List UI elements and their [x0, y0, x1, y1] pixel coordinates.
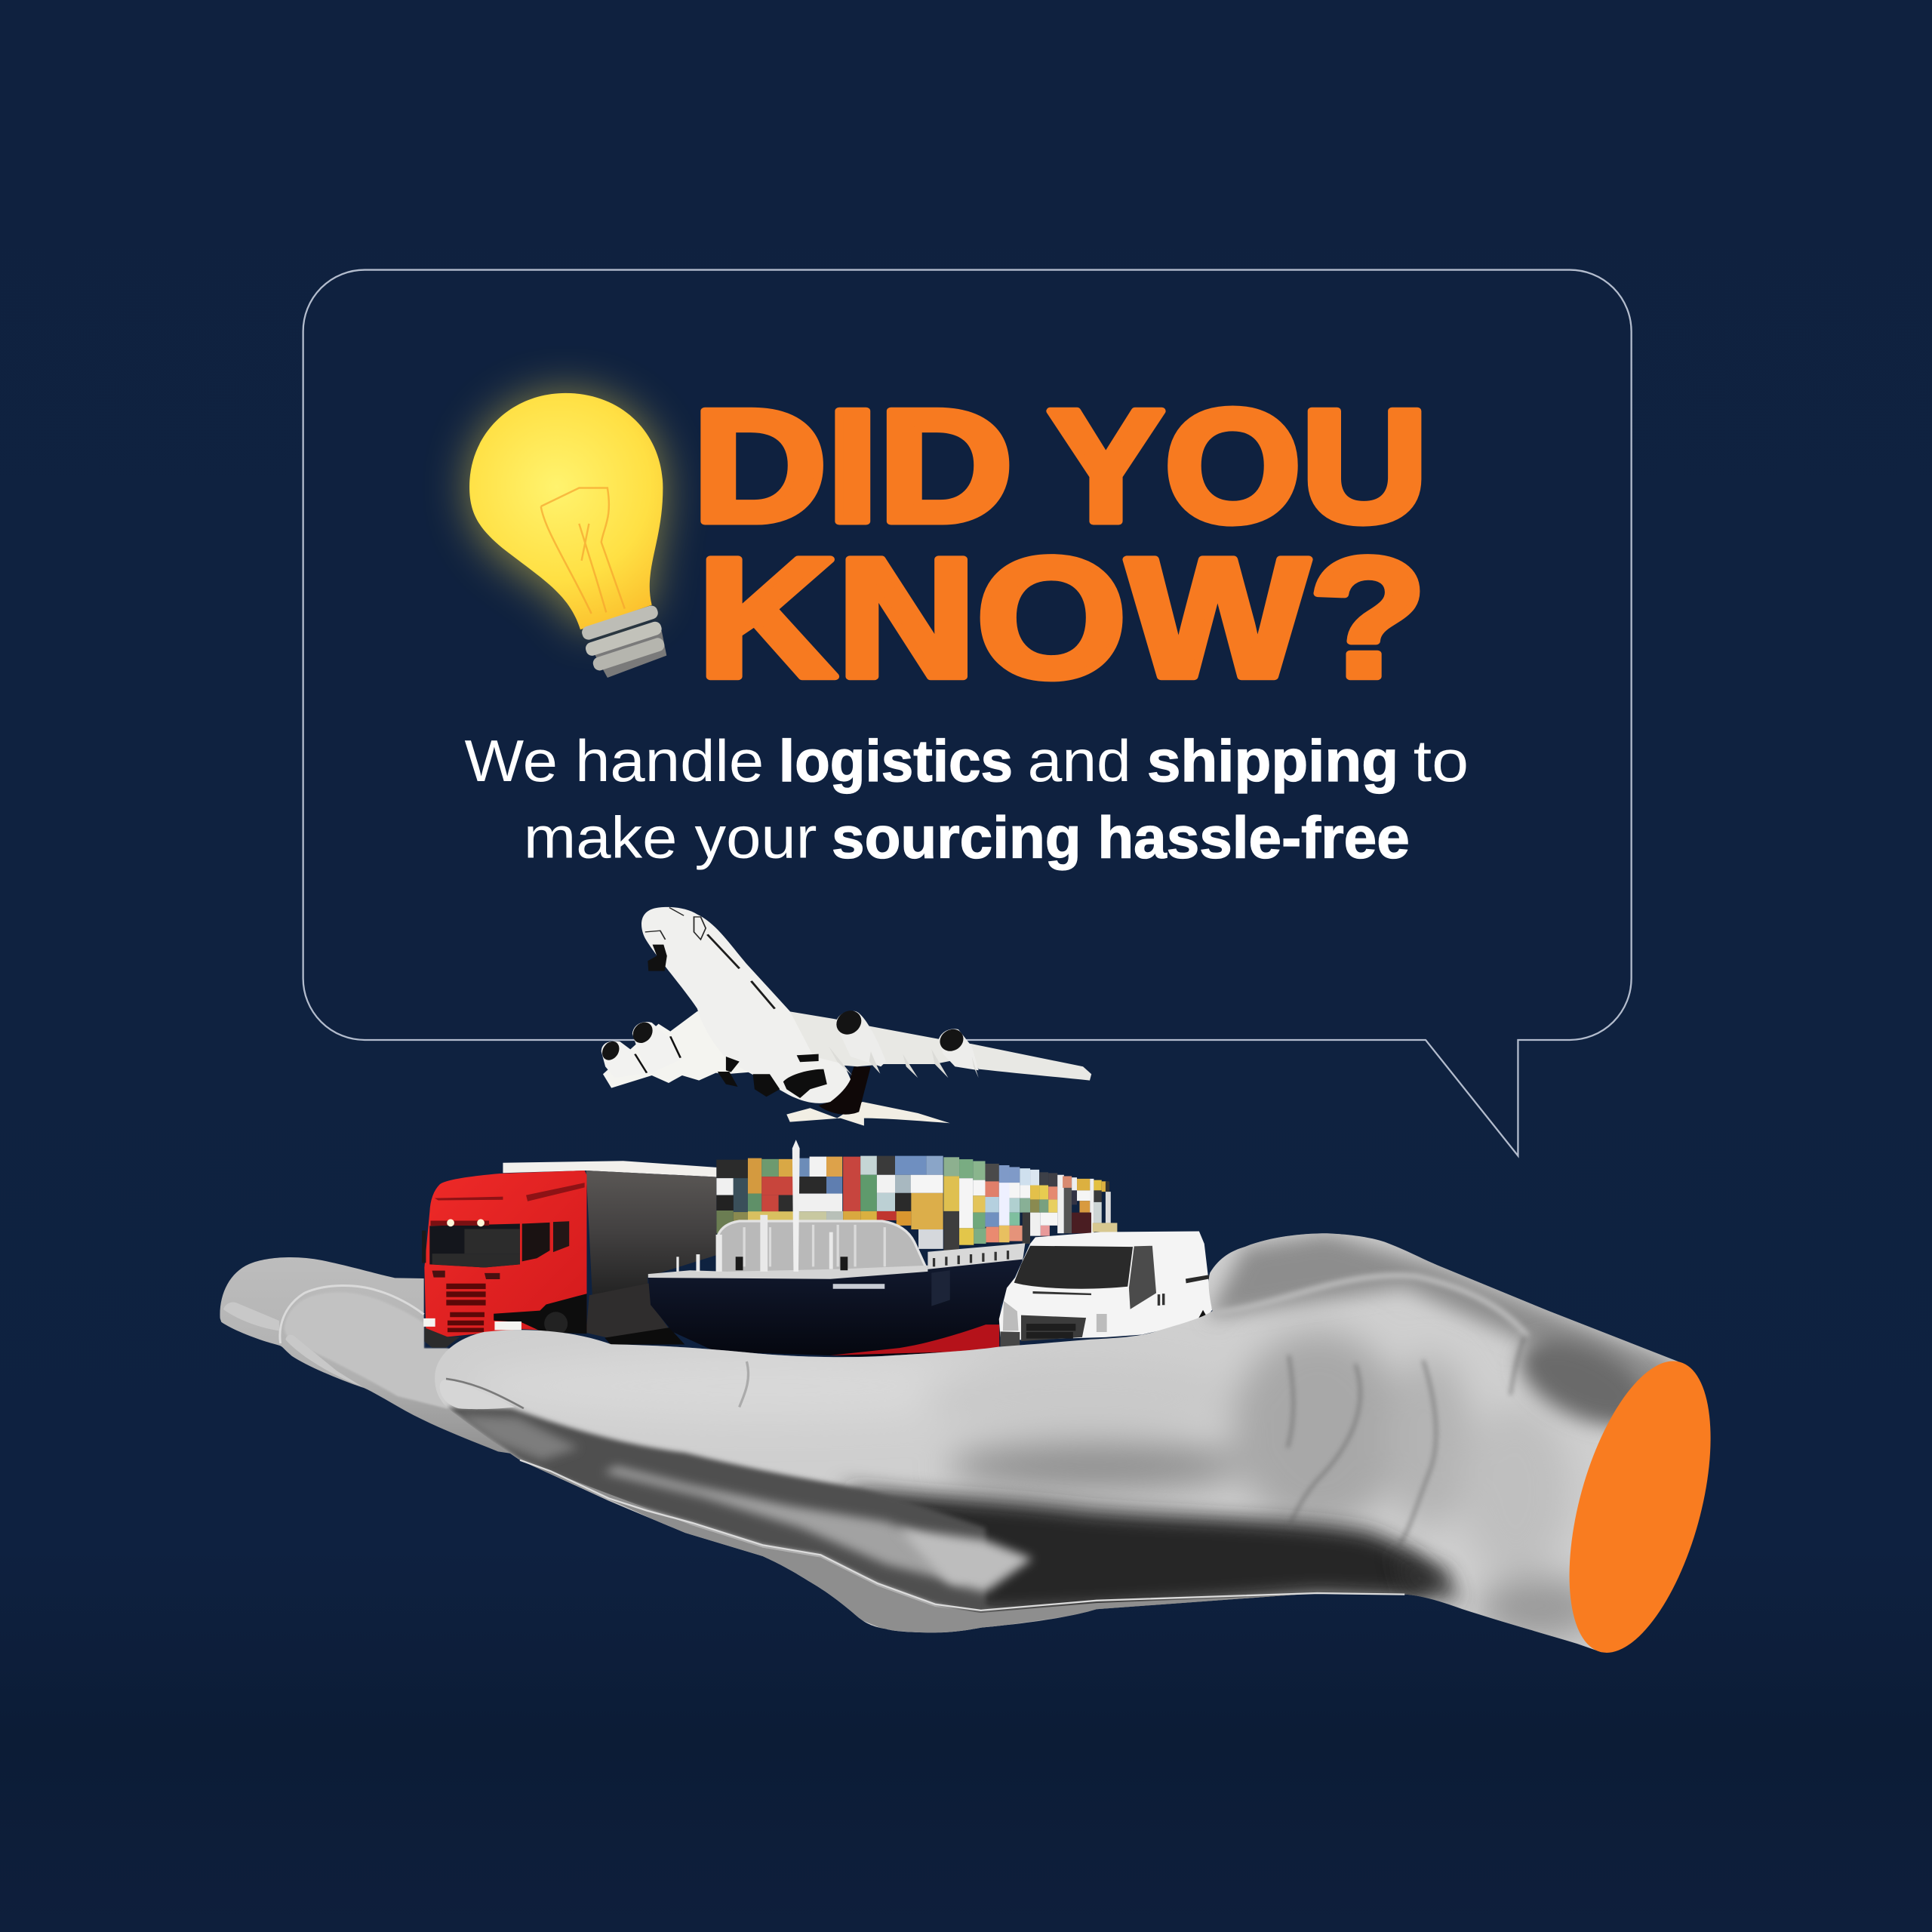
van grille slots: [1026, 1324, 1075, 1339]
bulb glow: [469, 393, 663, 629]
thumb nail crease: [446, 1379, 524, 1408]
plane fuselage: [641, 907, 851, 1103]
van side window: [1129, 1246, 1156, 1309]
first finger nail: [223, 1303, 279, 1331]
van hood line: [1032, 1291, 1091, 1295]
ship dark vents: [736, 1257, 848, 1270]
subtitle line 2: make your: [524, 804, 817, 870]
truck dashboard: [432, 1254, 520, 1268]
hand under-thumb fold: [446, 1407, 986, 1614]
van body: [999, 1231, 1212, 1340]
wrist dark wedge: [1392, 1550, 1460, 1601]
ship fence ticks: [934, 1251, 1008, 1266]
bulb socket: [580, 604, 666, 678]
van: [999, 1231, 1212, 1346]
truck lower dark body: [494, 1294, 586, 1334]
hand base: [435, 1233, 1678, 1652]
ship hull panel: [931, 1270, 950, 1306]
van headlights: [1003, 1301, 1107, 1332]
cargo containers: [716, 1156, 1117, 1251]
van bumper: [1000, 1331, 1020, 1346]
thumb nail: [440, 1380, 515, 1409]
plane nose gear: [648, 945, 667, 971]
cargo ship: [648, 1140, 1025, 1357]
van windshield: [1014, 1246, 1133, 1289]
hand wrist top shadow: [1509, 1334, 1641, 1437]
truck: [422, 1161, 716, 1348]
hand shading: [446, 1233, 1675, 1638]
plane flap fairings: [829, 1047, 979, 1078]
truck lamps: [432, 1271, 500, 1279]
hand fingertip streak: [897, 1527, 1032, 1592]
bulb glass: [469, 393, 663, 629]
ship mast: [792, 1140, 800, 1272]
truck side window: [522, 1223, 549, 1261]
ship hull red band: [830, 1324, 999, 1355]
wrist cut: orange ellipse: [1542, 1346, 1738, 1668]
truck windshield: [429, 1224, 520, 1268]
plane engine pylons: [635, 1036, 681, 1073]
subtitle line 1: [465, 728, 1469, 794]
plane near wing: [603, 1011, 783, 1088]
plane engines: [600, 1008, 979, 1078]
speech bubble: [303, 270, 1632, 1155]
subtitle line 2: [524, 804, 1410, 870]
title line 1: DID: [693, 377, 1013, 555]
subtitle line 1: shipping: [1147, 728, 1398, 794]
thumb crease: [740, 1361, 749, 1407]
title line 2: KNOW?: [697, 522, 1427, 712]
airplane: [600, 907, 1091, 1126]
plane tail: [786, 1102, 950, 1126]
hand: palm and wrist: [435, 1233, 1678, 1652]
truck mirror: [422, 1231, 426, 1263]
subtitle line 1: to: [1414, 728, 1469, 794]
title: [693, 377, 1428, 712]
hand ridge highlight: [1214, 1275, 1527, 1337]
truck trailer: [586, 1171, 716, 1295]
truck sun visor interior: [464, 1229, 520, 1254]
van grille: [1021, 1315, 1086, 1341]
hand fold lighter area: [604, 1466, 974, 1583]
plane rear body dark: [819, 1066, 871, 1115]
subtitle line 1: logistics: [779, 728, 1013, 794]
icon: light bulb: [469, 393, 666, 678]
plane far wing: [788, 1011, 1091, 1081]
plane cockpit details: [645, 908, 706, 940]
truck marker bar: [431, 1220, 489, 1226]
ship deck: [648, 1266, 928, 1279]
subtitle line 1: We handle: [465, 728, 764, 794]
title line 1: YOU: [1048, 377, 1428, 555]
second finger body: [285, 1292, 448, 1409]
hand lower edge highlight: [520, 1460, 1404, 1611]
truck front base: [424, 1327, 460, 1348]
truck white lights: [423, 1318, 521, 1330]
van door handles: [1158, 1294, 1164, 1306]
truck headlights top: [447, 1219, 485, 1226]
hand dark band: [838, 1484, 1444, 1617]
truck trailer roof: [503, 1161, 716, 1177]
bulb filament: [541, 488, 625, 614]
subtitle line 2: sourcing hassle-free: [832, 804, 1410, 870]
ship hull lettering mark: [833, 1284, 884, 1289]
title line 1: [693, 377, 1428, 555]
hand lower pad: [542, 1469, 1317, 1634]
ship hull: [648, 1260, 1023, 1357]
van stripe: [1186, 1275, 1209, 1283]
hand: fingers behind vehicles: [220, 1257, 549, 1459]
truck rear window: [553, 1221, 569, 1252]
truck trailer skirt: [586, 1283, 669, 1338]
ship deck posts: [676, 1215, 833, 1272]
second finger nail: [285, 1335, 362, 1386]
subtitle: [465, 728, 1469, 870]
plane window lines: [707, 934, 775, 1009]
ship fence: [928, 1243, 1025, 1272]
van rear wheel arch: [1198, 1310, 1208, 1320]
truck underside: [605, 1327, 685, 1345]
plane landing gear: [718, 1054, 827, 1098]
ship superstructure: [718, 1221, 928, 1276]
truck roof highlight: [435, 1183, 585, 1201]
ship panels: [744, 1225, 884, 1266]
truck wheel: [544, 1312, 568, 1335]
second finger contour: [280, 1286, 424, 1343]
truck grille: [446, 1284, 486, 1332]
hand mound shading: [1204, 1233, 1677, 1390]
vehicles: [422, 1140, 1212, 1357]
subtitle line 1: and: [1028, 728, 1131, 794]
hand wrinkles: [1287, 1337, 1524, 1546]
truck cab: [424, 1171, 586, 1337]
hand fold left gray: [456, 1414, 579, 1460]
